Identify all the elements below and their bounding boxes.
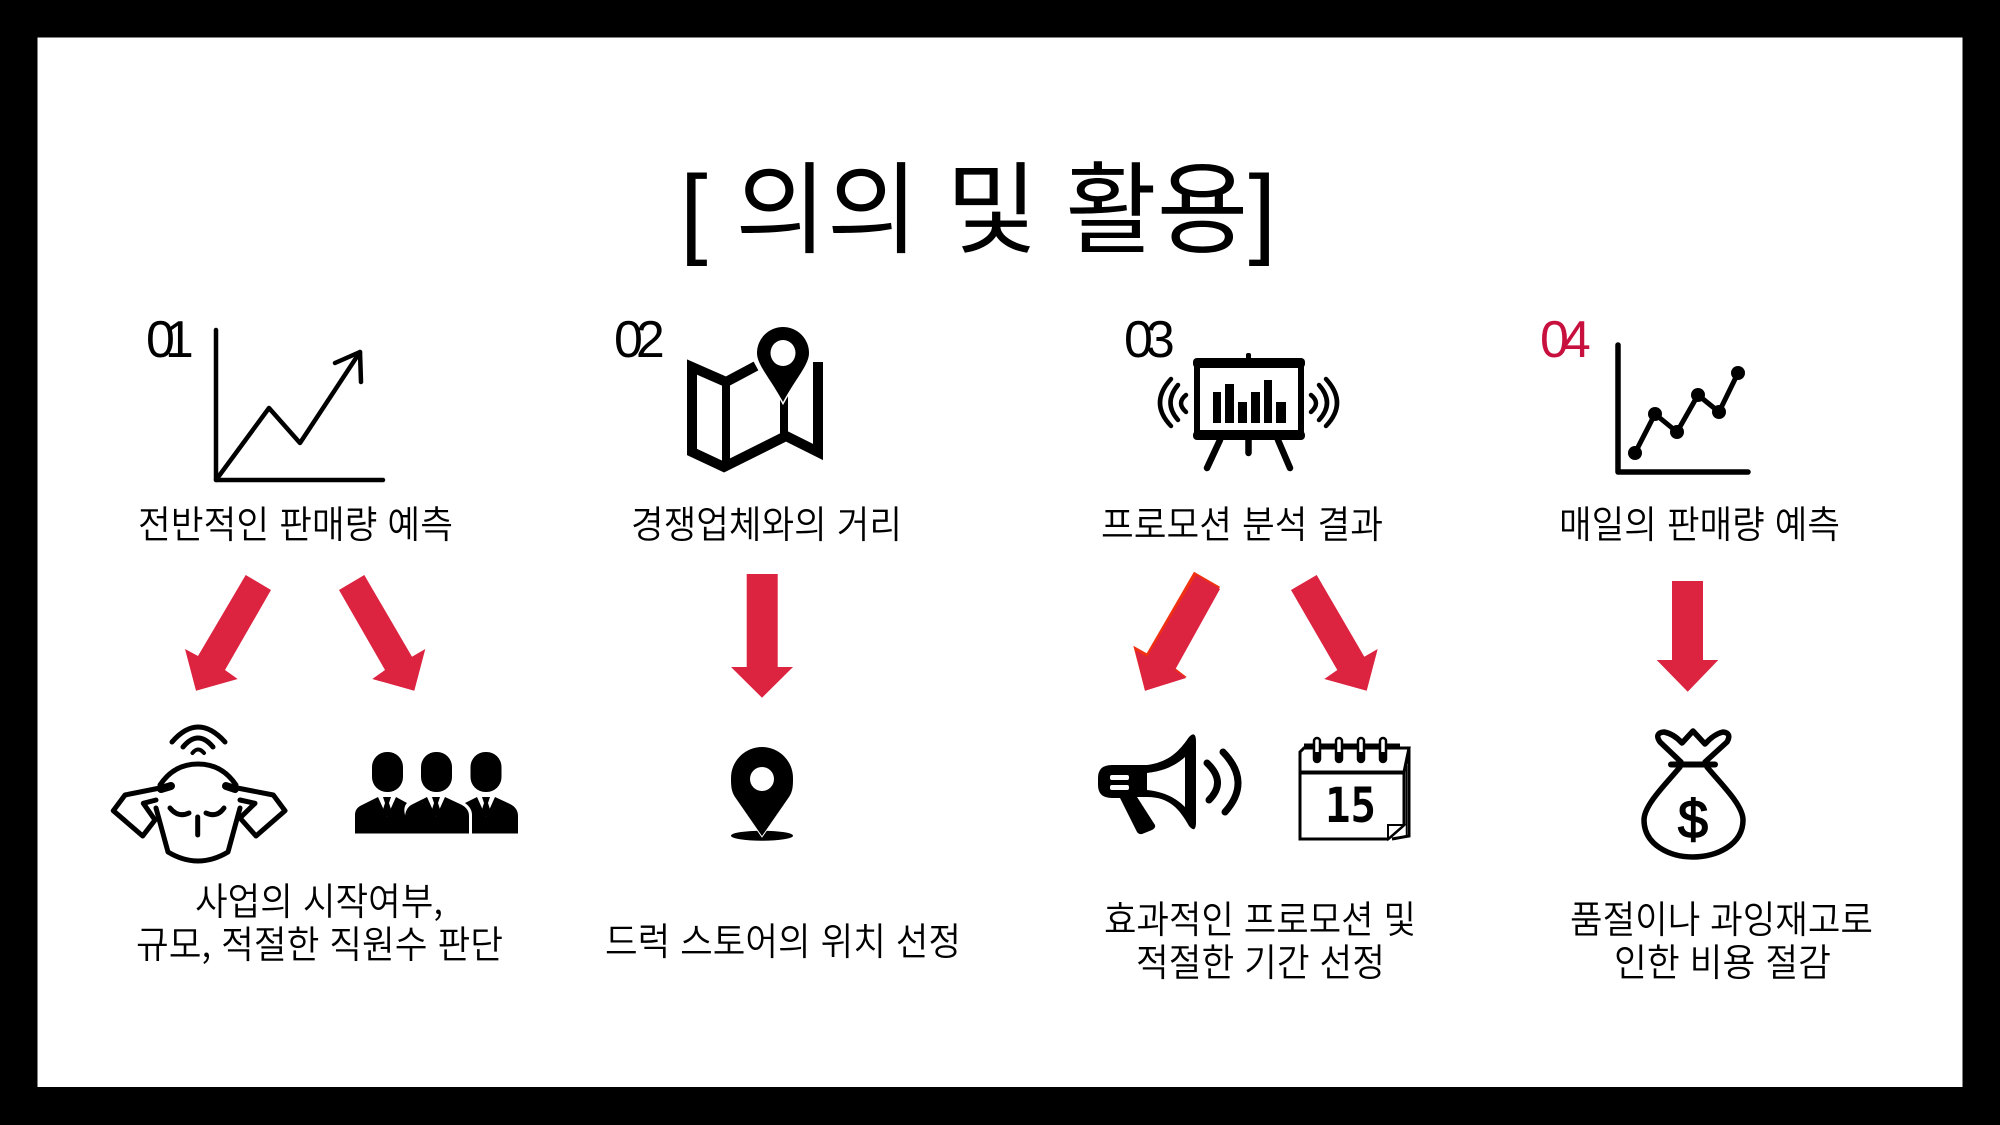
number 01: 01: [146, 311, 192, 369]
arrow: down: [1657, 581, 1718, 692]
icon: money bag: $: [1678, 790, 1708, 850]
icon: thinking head with signal: [113, 727, 285, 861]
icon: presentation board: [1160, 353, 1337, 468]
panel: 03 promotion analysis: [1098, 311, 1416, 987]
panel: 04 daily sales forecast: [1540, 311, 1873, 987]
icon: calendar showing 15: [1300, 738, 1409, 839]
number 04: 04: [1540, 311, 1590, 369]
icon: line chart with dots: [1618, 345, 1748, 472]
icon: money bag: [1644, 731, 1743, 857]
label: effective promotion: 효과적인 프로모션 및: [1104, 889, 1416, 944]
icon: rising line chart: [216, 330, 383, 480]
arrow: down right: [339, 575, 425, 691]
icon: three business people: [355, 752, 518, 834]
label: overall sales forecast: 전반적인 판매량 예측: [138, 494, 453, 549]
number 03: 03: [1124, 311, 1173, 369]
icon: calendar showing 15: 15: [1325, 778, 1376, 834]
icon: location pin: [731, 747, 793, 841]
label: drugstore site selection: 드럭 스토어의 위치 선정: [605, 911, 961, 966]
arrow: down: [731, 574, 793, 698]
arrow: down left: [1133, 572, 1220, 691]
number 02: 02: [614, 311, 663, 369]
label: promotion analysis result: 프로모션 분석 결과: [1101, 494, 1383, 549]
arrow: down right: [1291, 575, 1378, 691]
label: stockout and overstock: 품절이나 과잉재고로: [1570, 889, 1873, 944]
icon: megaphone: [1098, 734, 1238, 834]
title: [ 의의 및 활용]: [680, 155, 1276, 267]
label: daily sales forecast: 매일의 판매량 예측: [1559, 494, 1840, 549]
label: cost saving: 인한 비용 절감: [1614, 932, 1831, 987]
label: business start and staffing: 사업의 시작여부,: [195, 871, 443, 926]
panel: 01 overall sales forecast: [113, 311, 518, 969]
panel: 02 distance from competitors: [605, 311, 961, 966]
arrow: down left: [185, 575, 271, 691]
label: proper period selection: 적절한 기간 선정: [1136, 932, 1385, 987]
icon: map with pin: [692, 327, 818, 467]
label: distance from competitors: 경쟁업체와의 거리: [631, 494, 902, 549]
label: scale and staffing decision: 규모, 적절한 직원수 판단: [136, 914, 503, 969]
